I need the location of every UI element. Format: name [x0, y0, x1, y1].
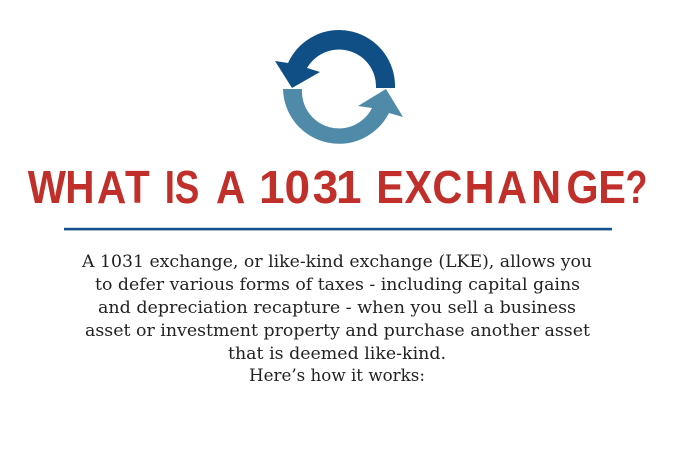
- intro text block: [81, 252, 592, 386]
- title: WHAT: [28, 163, 150, 214]
- icon: dark blue arrow: [275, 30, 395, 88]
- intro text block: that is deemed like-kind.: [228, 344, 446, 364]
- title: ?: [626, 162, 647, 213]
- divider rule: [64, 228, 612, 230]
- intro text block: asset or investment property and purchase another asset: [85, 321, 590, 341]
- intro text block: and depreciation recapture - when you sell a business: [98, 298, 576, 318]
- title: A: [216, 163, 245, 214]
- title: IS: [165, 161, 199, 213]
- icon: light blue arrow: [283, 89, 403, 144]
- title: EXCHANGE: [376, 162, 626, 214]
- icon: circular exchange arrows: [275, 30, 403, 144]
- title: [28, 161, 647, 214]
- intro text block: A 1031 exchange, or like-kind exchange (LKE), allows you: [81, 252, 592, 272]
- intro text block: to defer various forms of taxes - including capital gains: [95, 275, 580, 295]
- intro text block: Here’s how it works:: [249, 366, 425, 386]
- title: 1031: [259, 161, 362, 213]
